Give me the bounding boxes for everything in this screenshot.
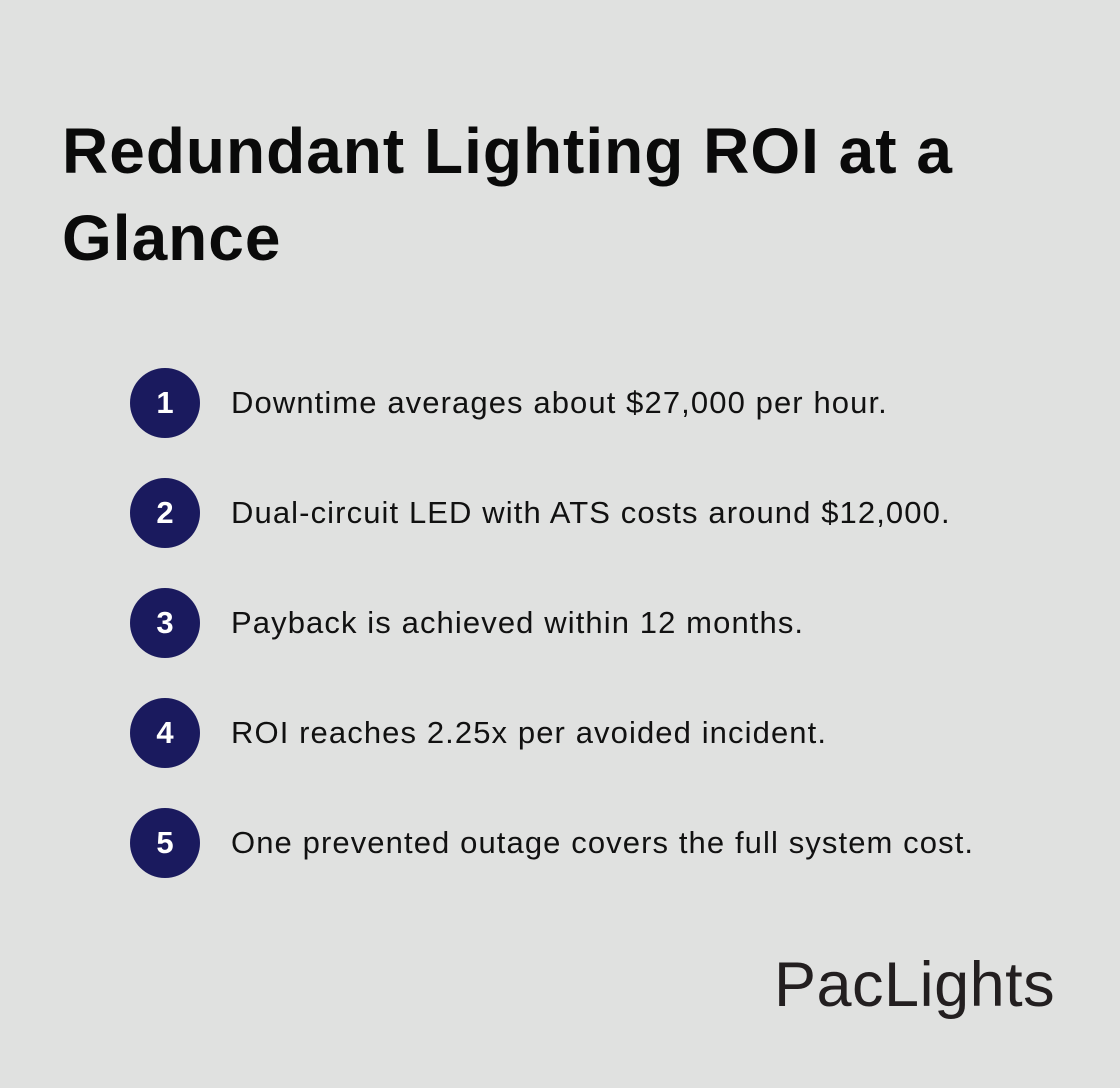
logo: PacLights: PacLights bbox=[774, 950, 1055, 1020]
list item 2 bbox=[130, 478, 951, 548]
number badge 5: 5 bbox=[156, 825, 174, 860]
title: Glance bbox=[62, 202, 281, 274]
number badge 2: 2 bbox=[156, 495, 174, 530]
title: Redundant Lighting ROI at a bbox=[62, 115, 953, 187]
list item 4 bbox=[130, 698, 827, 768]
text 1: Downtime averages about $27,000 per hour. bbox=[231, 385, 888, 420]
text 5: One prevented outage covers the full system cost. bbox=[231, 825, 974, 860]
number badge 4 bbox=[130, 698, 200, 768]
number badge 1 bbox=[130, 368, 200, 438]
number badge 5 bbox=[130, 808, 200, 878]
list item 5 bbox=[130, 808, 974, 878]
number badge 3: 3 bbox=[156, 605, 174, 640]
list item 3 bbox=[130, 588, 804, 658]
number badge 2 bbox=[130, 478, 200, 548]
number badge 3 bbox=[130, 588, 200, 658]
number badge 1: 1 bbox=[156, 385, 174, 420]
text 4: ROI reaches 2.25x per avoided incident. bbox=[231, 715, 827, 750]
text 3: Payback is achieved within 12 months. bbox=[231, 605, 804, 640]
number badge 4: 4 bbox=[156, 715, 174, 750]
text 2: Dual-circuit LED with ATS costs around $12,000. bbox=[231, 495, 951, 530]
title bbox=[62, 115, 953, 274]
list item 1 bbox=[130, 368, 888, 438]
